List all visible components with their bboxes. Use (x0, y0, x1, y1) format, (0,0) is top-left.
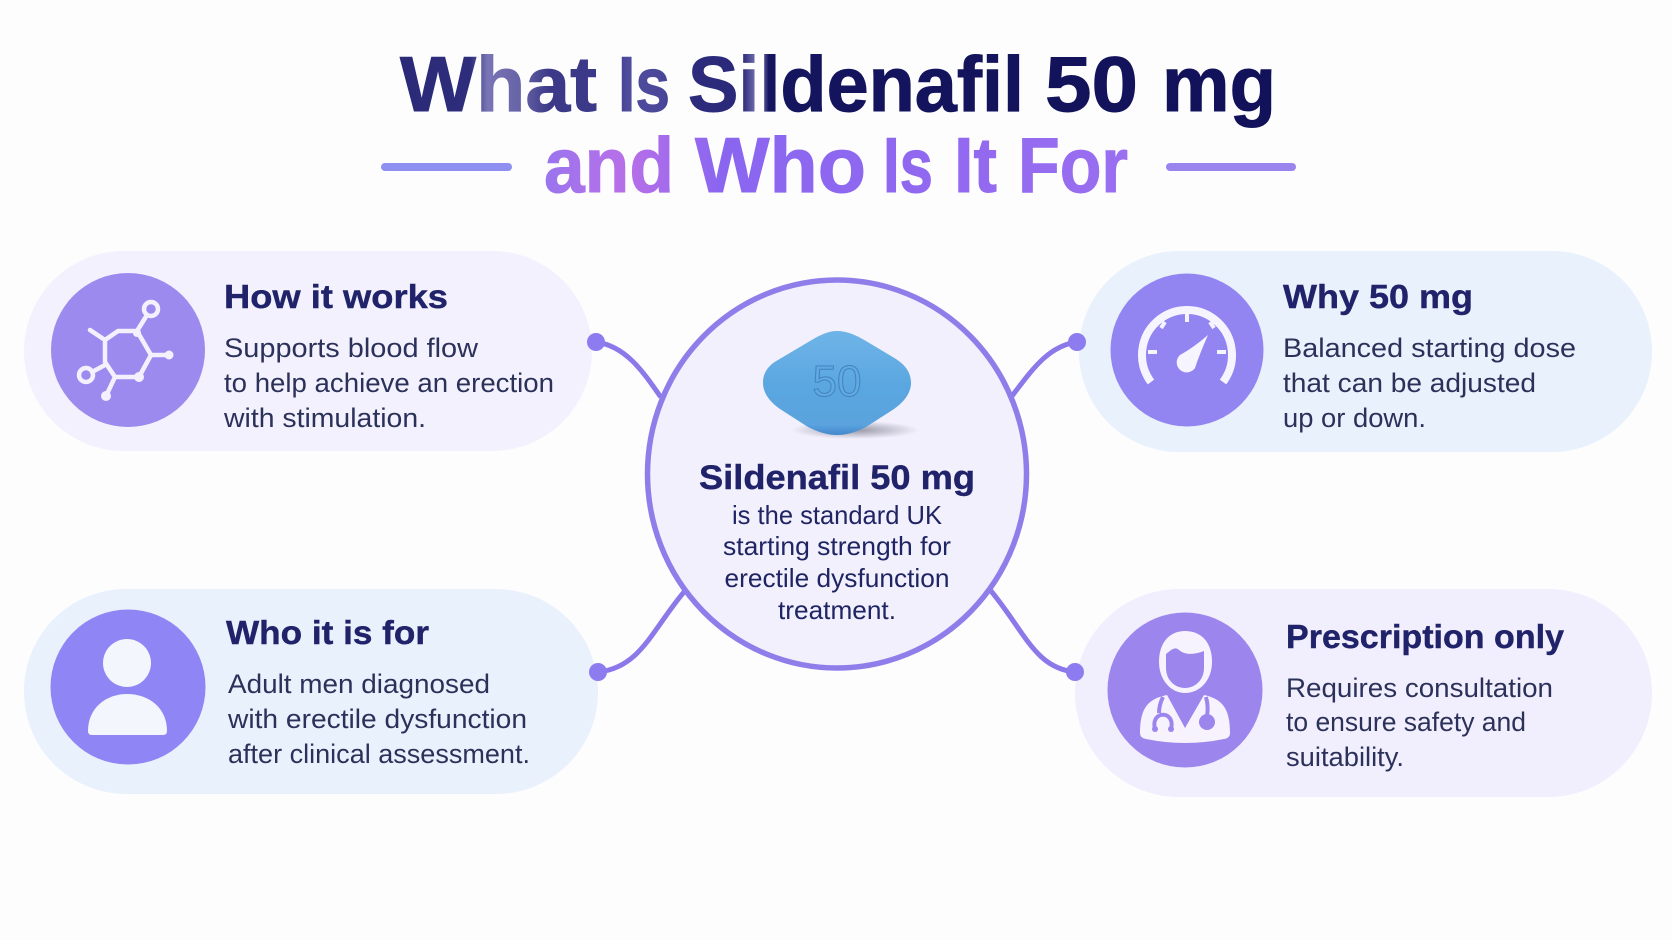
panel: who it is for (24, 589, 607, 794)
pill body (763, 331, 911, 435)
center circle (648, 280, 1026, 668)
panel: how it works (24, 251, 605, 451)
icon: doctor (1108, 612, 1262, 768)
title (381, 40, 1296, 209)
pill imprint: 50 (813, 357, 861, 406)
title line 1: Sildenafil (688, 40, 1024, 128)
connector dot (1066, 663, 1084, 681)
body text: with erectile dysfunction (227, 704, 527, 734)
connector: who it is for (598, 592, 684, 672)
panel: prescription only (1066, 589, 1652, 797)
title line 1 (400, 40, 1276, 128)
connector: why 50 mg (1012, 342, 1077, 396)
body text: Requires consultation (1286, 673, 1553, 703)
body text (1283, 333, 1576, 433)
circle (648, 280, 1026, 668)
body text: to help achieve an erection (224, 368, 554, 398)
panel: why 50 mg (1068, 251, 1652, 452)
title rule right (1166, 163, 1296, 171)
title line 2: Is (883, 121, 933, 209)
connector dot (1068, 333, 1086, 351)
body text: that can be adjusted (1283, 368, 1536, 398)
body text (223, 333, 554, 433)
body text: after clinical assessment. (228, 739, 530, 769)
title line 2: Who (695, 121, 866, 209)
body text: up or down. (1283, 403, 1426, 433)
card (1079, 251, 1652, 452)
title line 2 (544, 121, 1128, 209)
title line 2: and (544, 121, 674, 209)
center body text: starting strength for (723, 531, 951, 561)
connector dot (589, 663, 607, 681)
title line 1: Is (618, 40, 670, 128)
body text (1286, 673, 1553, 772)
body text: suitability. (1286, 742, 1404, 772)
center body text: erectile dysfunction (724, 563, 950, 593)
card (24, 251, 592, 451)
connector: prescription only (991, 591, 1075, 672)
needle (1177, 335, 1208, 372)
center heading: Sildenafil 50 mg (699, 459, 975, 497)
heading: Why 50 mg (1283, 278, 1473, 315)
pill image (763, 331, 919, 439)
heading: How it works (224, 278, 448, 315)
connector dot (587, 333, 605, 351)
center body text: treatment. (778, 595, 896, 625)
title line 2: It (954, 121, 997, 209)
icon: person (50, 610, 206, 764)
title line 1: What (400, 40, 597, 128)
body text: with stimulation. (223, 403, 426, 433)
icon: molecule (51, 273, 205, 427)
heading: Prescription only (1286, 618, 1565, 655)
title rule left (381, 163, 512, 171)
body text: Adult men diagnosed (228, 669, 490, 699)
title line 2: For (1018, 121, 1128, 209)
body text: Supports blood flow (224, 333, 479, 363)
title line 1: mg (1162, 40, 1276, 128)
center body text (723, 500, 951, 625)
body text: Balanced starting dose (1283, 333, 1576, 363)
icon: gauge (1110, 274, 1264, 426)
card (1075, 589, 1652, 797)
connectors (596, 342, 1077, 672)
center body text: is the standard UK (732, 500, 943, 530)
body text: to ensure safety and (1286, 707, 1526, 737)
title line 1: 50 (1045, 40, 1138, 128)
body text (227, 669, 530, 769)
pill shadow (791, 421, 919, 439)
heading: Who it is for (226, 614, 429, 651)
connector: how it works (596, 342, 660, 396)
card (24, 589, 598, 794)
